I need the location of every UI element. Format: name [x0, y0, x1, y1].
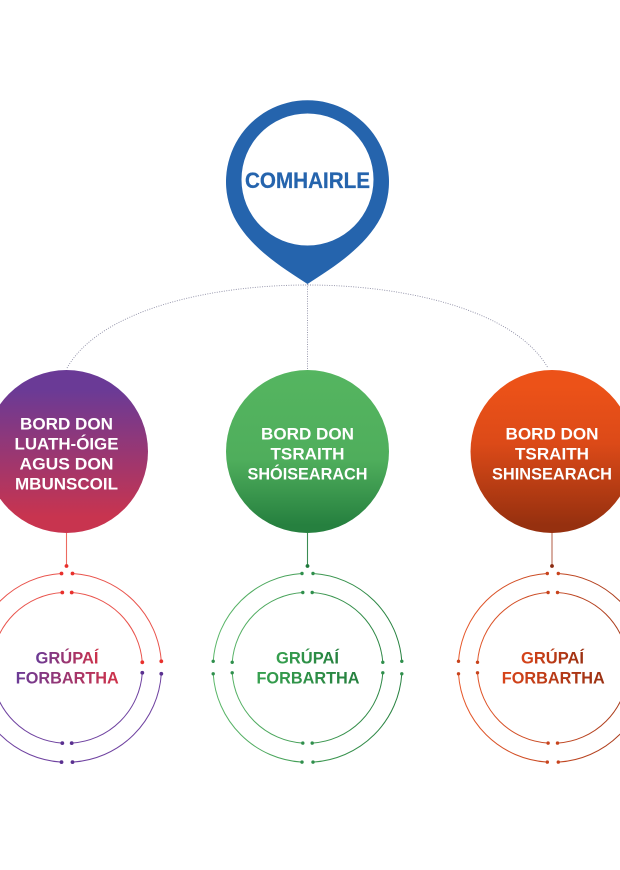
board name: BORD DON: [261, 424, 354, 443]
dotted connector: council to boards: [67, 284, 548, 370]
board name: MBUNSCOIL: [15, 474, 118, 493]
board name: SHÓISEARACH: [248, 464, 368, 483]
connector: centre board to groups: [306, 533, 309, 568]
label: centre development groups: GRÚPAÍ: [276, 648, 340, 667]
label: right development groups: GRÚPAÍ: [521, 648, 585, 667]
connector: left board to groups: [65, 533, 68, 568]
label: right development groups: FORBARTHA: [502, 668, 605, 688]
board name: TSRAITH: [270, 444, 344, 463]
board name: TSRAITH: [515, 444, 589, 463]
label: left development groups: GRÚPAÍ: [36, 648, 100, 667]
development groups: right rings: [457, 572, 620, 764]
council pin: [226, 100, 389, 284]
board: junior cycle: [226, 370, 389, 533]
board: senior cycle: [470, 370, 620, 533]
board name: SHINSEARACH: [492, 464, 612, 483]
connector: right board to groups: [550, 533, 554, 568]
label: left development groups: FORBARTHA: [16, 668, 119, 688]
development groups: centre rings: [212, 572, 404, 764]
board name: [492, 424, 612, 483]
label: left development groups: [16, 648, 119, 688]
label: centre development groups: [256, 648, 360, 688]
board: early years and primary: [0, 370, 148, 533]
label: centre development groups: FORBARTHA: [256, 668, 360, 688]
board name: LUATH-ÓIGE: [14, 434, 118, 453]
board name: BORD DON: [506, 424, 598, 443]
label: right development groups: [502, 648, 605, 688]
board name: [248, 424, 368, 483]
development groups: left rings: [0, 572, 163, 764]
board name: BORD DON: [20, 414, 113, 433]
board name: [14, 414, 118, 493]
council title: COMHAIRLE: [245, 168, 370, 193]
board name: AGUS DON: [20, 454, 114, 473]
